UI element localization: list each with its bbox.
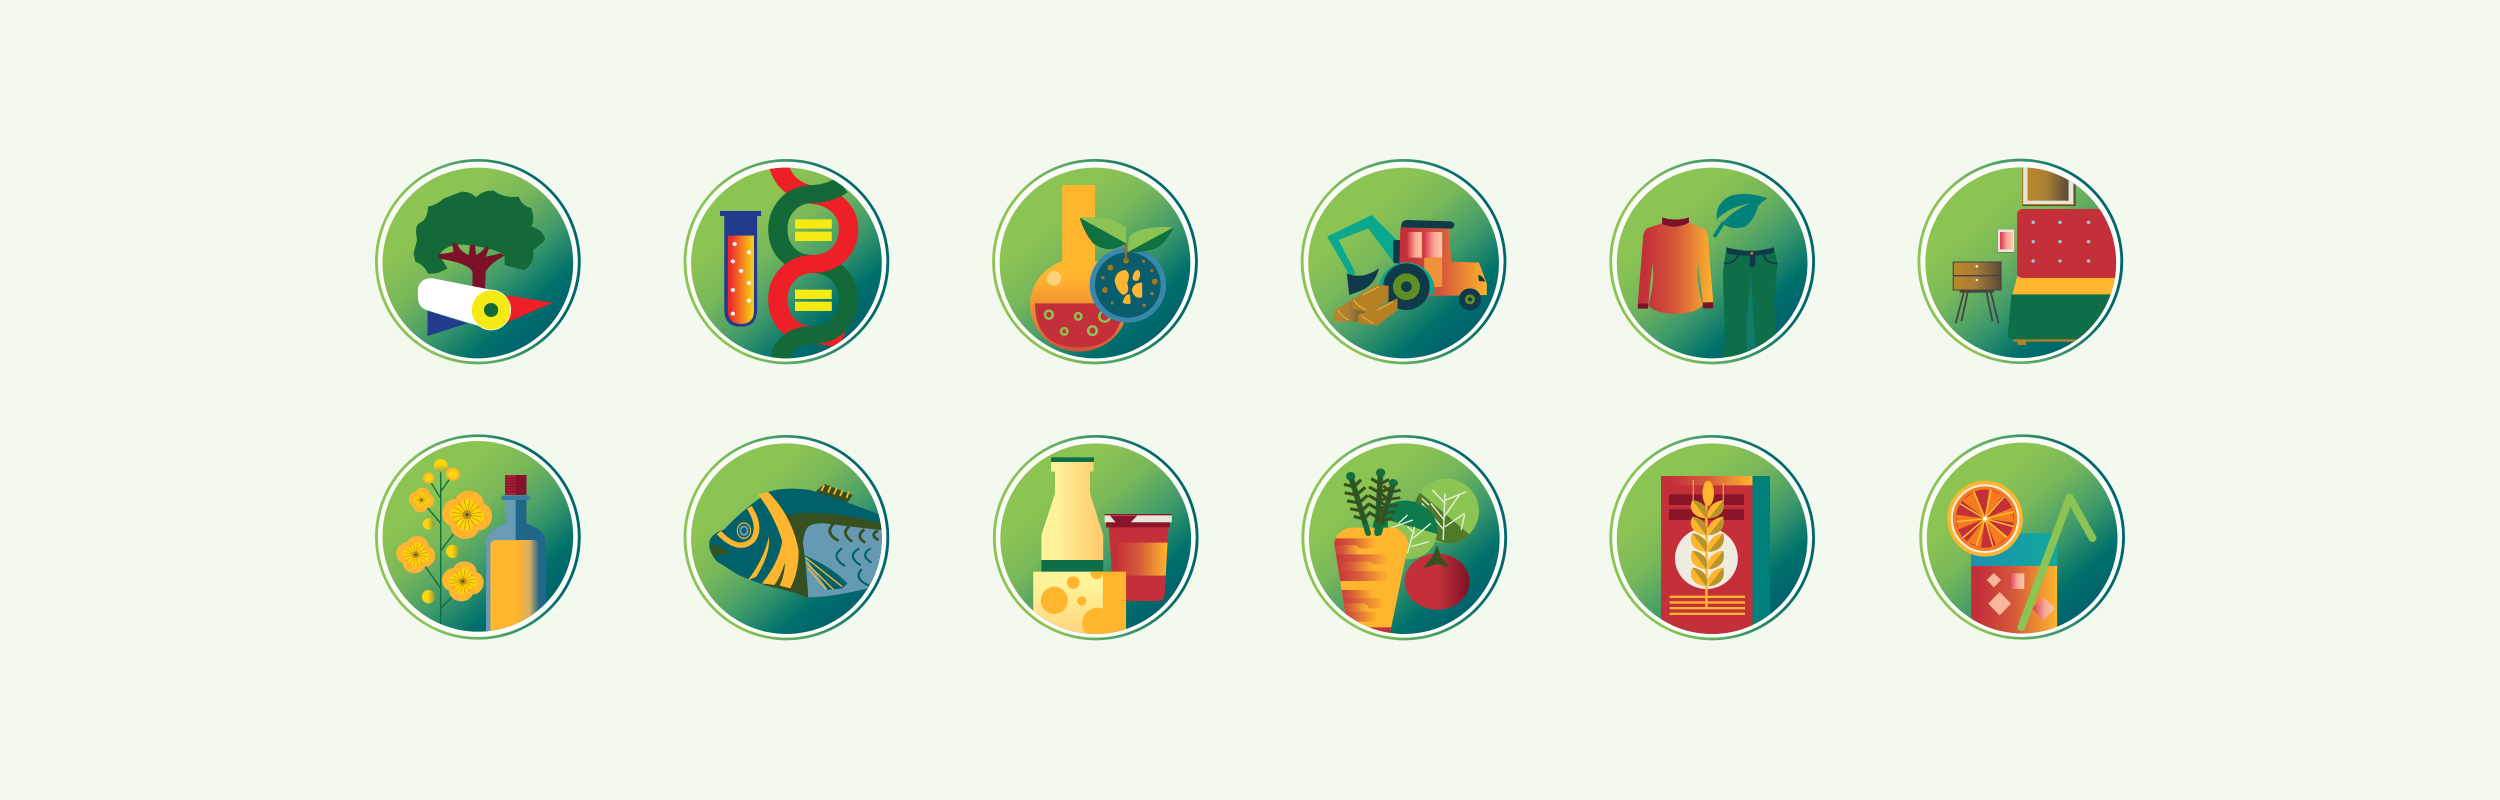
icon: fish xyxy=(685,436,888,639)
icon: tree and log xyxy=(376,160,579,363)
icon row 1, left pair xyxy=(376,160,888,363)
icon row 1, middle pair xyxy=(994,160,1505,363)
icon: flask and fruit xyxy=(994,160,1196,363)
icon: rapeseed and oil bottle xyxy=(376,436,579,640)
icon: dna and test tube xyxy=(685,160,888,363)
icon row 2, right pair xyxy=(1611,436,2124,639)
icon: vegetables xyxy=(1303,436,1506,639)
icon: iced drink with orange slice xyxy=(1921,436,2124,639)
icon row 1, right pair xyxy=(1611,160,2131,363)
icon: bedroom xyxy=(1919,160,2131,363)
icon row 2, left pair xyxy=(376,436,888,640)
icon: sweater, jeans and leaf xyxy=(1611,160,1814,363)
icon: tractor and logs xyxy=(1302,160,1505,363)
icon: dairy xyxy=(994,436,1197,639)
icon row 2, middle pair xyxy=(994,436,1506,639)
icon: cereal box with wheat xyxy=(1611,436,1814,639)
